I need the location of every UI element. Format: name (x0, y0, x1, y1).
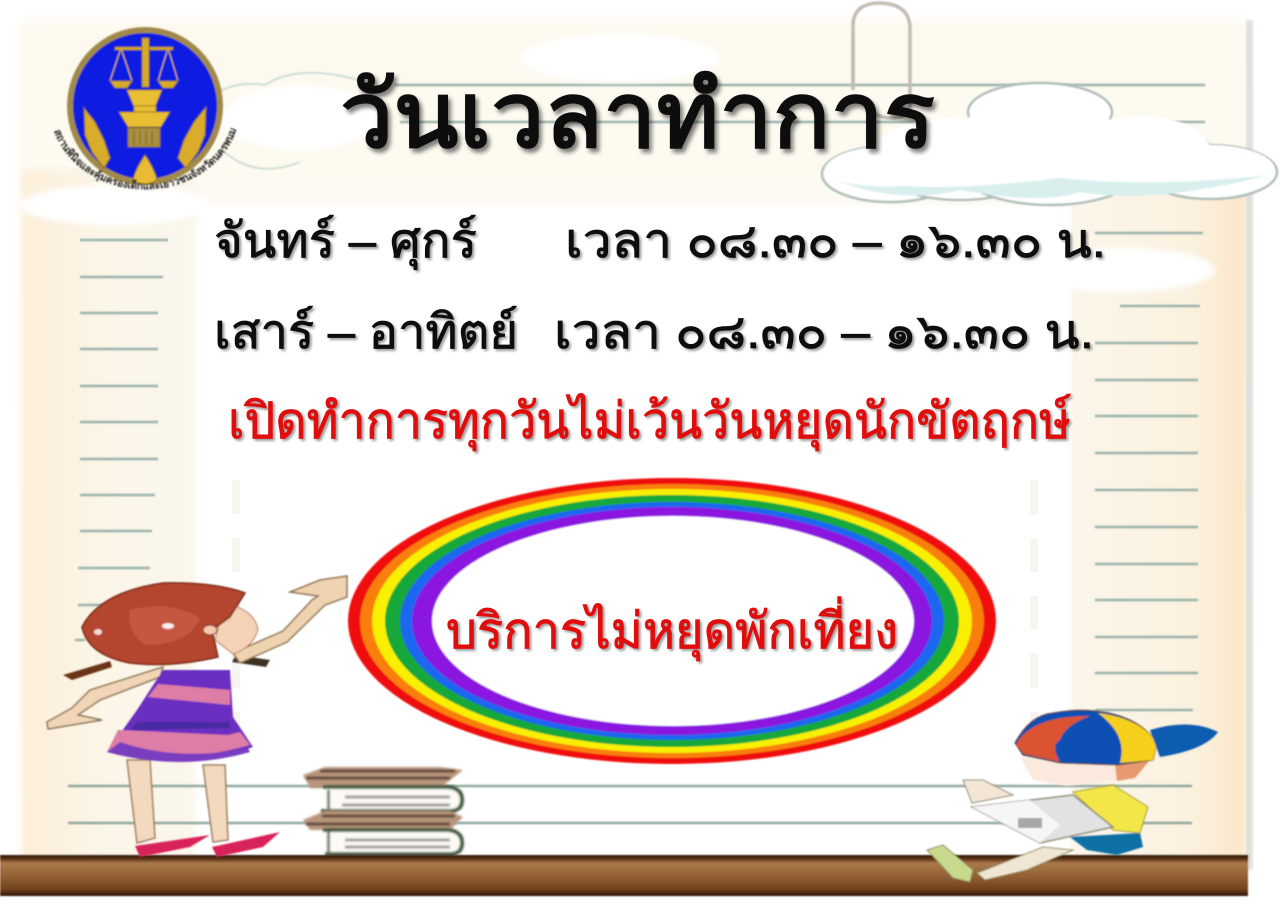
shirt (1073, 785, 1148, 833)
cap brim (1150, 724, 1218, 757)
logo caption: สถานพินิจและคุ้มครองเด็กและเยาวชนจังหวัดนครพนม (53, 127, 238, 191)
notice: open every day: เปิดทำการทุกวันไม่เว้นวันหยุดนักขัตฤกษ์ (228, 393, 1071, 451)
icon: tiered pedestal (119, 90, 170, 147)
ruled lines (68, 85, 1205, 823)
icon: left naga (84, 108, 110, 168)
cap (1015, 710, 1157, 765)
icon: right naga (178, 107, 206, 168)
illustration: boy reading (927, 710, 1218, 882)
rainbow ring (348, 478, 996, 764)
book (972, 795, 1113, 843)
clouds (20, 34, 1277, 292)
stack of books (303, 767, 463, 855)
dashed centre stripes (236, 480, 1034, 760)
face (215, 603, 258, 654)
shoes (135, 832, 280, 857)
icon: lotus flame (133, 155, 157, 184)
dress (107, 670, 253, 761)
schedule: monday to friday (214, 215, 1106, 270)
arm right (233, 576, 347, 663)
legs (127, 760, 228, 843)
legs (977, 847, 1073, 880)
shorts (1070, 833, 1143, 855)
illustration: girl reaching up (47, 576, 347, 857)
hair (82, 583, 245, 665)
braids (63, 661, 112, 680)
hand (963, 780, 1013, 803)
icon: paper clip (853, 3, 910, 118)
schedule: saturday to sunday: เสาร์ – อาทิตย์ (214, 306, 518, 359)
schedule: monday to friday: เวลา ๐๘.๓๐ – ๑๖.๓๐ น. (565, 215, 1106, 268)
rainbow message: บริการไม่หยุดพักเที่ยง (446, 597, 898, 661)
wooden shelf (0, 855, 1248, 896)
schedule: saturday to sunday: เวลา ๐๘.๓๐ – ๑๖.๓๐ น. (554, 306, 1094, 359)
logo: provincial agency seal (53, 26, 238, 191)
foot (927, 845, 973, 882)
title: วันเวลาทำการ (340, 65, 935, 167)
face (1020, 757, 1150, 786)
schedule: saturday to sunday (214, 306, 1094, 359)
icon: scales of justice (110, 38, 178, 88)
schedule: monday to friday: จันทร์ – ศุกร์ (214, 215, 477, 270)
arm left (47, 667, 163, 729)
